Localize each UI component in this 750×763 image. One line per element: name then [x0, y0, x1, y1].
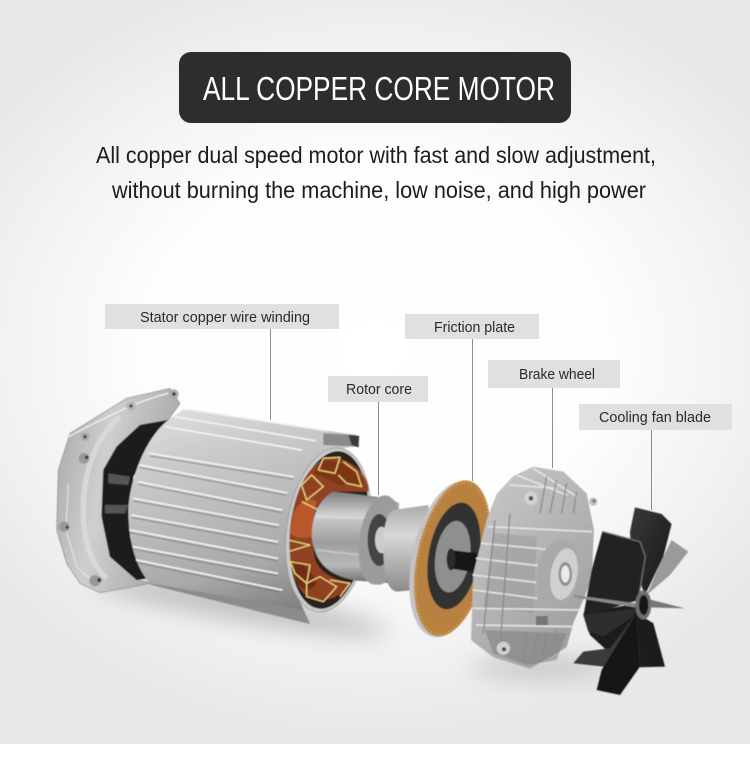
subtitle text: All copper dual speed motor with fast and slow adjustment, [96, 142, 656, 168]
label: cooling fan blade: Cooling fan blade [599, 410, 711, 426]
cooling fan [573, 507, 688, 695]
subtitle text [96, 142, 656, 203]
subtitle text: without burning the machine, low noise, and high power [111, 177, 646, 203]
label: brake wheel [488, 360, 620, 388]
label: friction plate: Friction plate [434, 320, 515, 336]
label: rotor core: Rotor core [346, 382, 412, 398]
leader lines [270, 329, 652, 510]
stator ring [276, 442, 381, 618]
label: stator copper wire winding [105, 304, 339, 329]
end bell [57, 388, 180, 593]
rotor core [312, 492, 399, 583]
hub [383, 505, 433, 592]
label: brake wheel: Brake wheel [519, 367, 595, 383]
dark opening [102, 420, 168, 580]
brake wheel [471, 467, 594, 669]
fins [130, 409, 327, 590]
title badge [179, 52, 571, 123]
shaft [450, 550, 478, 573]
label: cooling fan blade [579, 404, 732, 430]
friction plate [396, 474, 502, 645]
label: stator copper wire winding: Stator copper wire winding [140, 310, 310, 326]
motor illustration [57, 388, 688, 695]
title badge: ALL COPPER CORE MOTOR [203, 70, 555, 107]
yellow ties [288, 457, 362, 602]
ground shadows [90, 566, 610, 676]
copper windings [289, 457, 368, 600]
label: friction plate [405, 314, 539, 339]
motor housing [57, 388, 404, 624]
rotor end bearing [353, 467, 597, 669]
label: rotor core [328, 376, 428, 402]
finned body [128, 409, 358, 624]
